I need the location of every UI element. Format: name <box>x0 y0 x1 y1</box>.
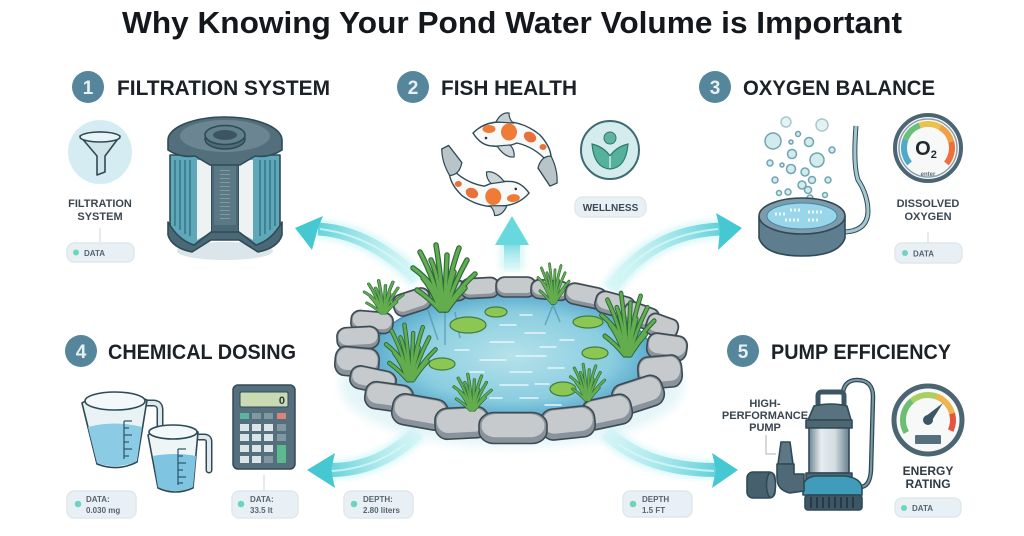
data pill: 0.030 mg <box>67 491 136 518</box>
heading: pump efficiency: PUMP EFFICIENCY <box>771 340 951 364</box>
data pill: DATA <box>912 504 933 513</box>
calculator <box>233 385 295 469</box>
data pill: 1.5 FT: DEPTH <box>642 495 669 504</box>
heading: fish health: 2 <box>408 78 418 99</box>
label: dissolved oxygen: DISSOLVED <box>897 198 959 210</box>
water <box>372 294 652 418</box>
heading: chemical dosing: 4 <box>76 342 87 363</box>
data pill <box>895 498 961 517</box>
icon: funnel <box>68 120 132 184</box>
gauge: dissolved oxygen: O <box>915 138 931 160</box>
submersible pump <box>747 380 873 510</box>
heading: oxygen balance <box>699 71 935 103</box>
pond plants <box>364 245 654 410</box>
data pill: 0.030 mg: 0.030 mg <box>86 506 120 515</box>
label: dissolved oxygen: OXYGEN <box>904 211 952 223</box>
label: high-performance pump: PERFORMANCE <box>722 410 808 422</box>
data pill: 33.5 lt <box>232 475 298 518</box>
data pill: 2.80 liters <box>344 491 413 518</box>
arrow: to oxygen <box>610 213 742 290</box>
heading: oxygen balance: 3 <box>710 78 720 99</box>
measuring jugs <box>82 392 209 492</box>
lily pads <box>429 307 608 396</box>
label: energy rating: RATING <box>905 477 951 491</box>
title: Why Knowing Your Pond Water Volume is Important <box>122 5 902 40</box>
arrow: to filtration <box>295 216 418 280</box>
air stone hose <box>842 126 868 232</box>
filter cartridge <box>168 117 282 260</box>
label: energy rating: ENERGY <box>903 464 953 478</box>
data pill: DATA <box>913 250 934 258</box>
heading: fish health <box>397 71 577 103</box>
panel: filtration system <box>67 71 330 262</box>
central pond <box>334 245 689 447</box>
data pill: 33.5 lt: 33.5 lt <box>250 506 273 515</box>
gauge: energy rating <box>894 386 962 454</box>
data pill: 0.030 mg: DATA: <box>86 495 110 504</box>
heading: filtration system: 1 <box>83 78 94 99</box>
heading: oxygen balance: OXYGEN BALANCE <box>743 76 935 100</box>
data pill: 1.5 FT <box>623 491 692 517</box>
arrows <box>295 213 742 488</box>
label: filtration system: SYSTEM <box>77 211 123 223</box>
heading: filtration system: FILTRATION SYSTEM <box>117 76 330 100</box>
data pill: 2.80 liters: 2.80 liters <box>363 506 400 515</box>
heading: chemical dosing <box>65 335 296 367</box>
gauge: dissolved oxygen: 2 <box>931 149 937 161</box>
calculator: 0 <box>279 395 285 407</box>
label: high-performance pump: PUMP <box>749 422 781 434</box>
data pill <box>67 228 134 262</box>
arrow: to pump <box>606 432 738 488</box>
label pill: wellness <box>575 197 646 217</box>
panel: oxygen balance <box>699 71 962 263</box>
koi fish pair <box>441 113 557 219</box>
bubbles <box>765 117 835 206</box>
data pill: DATA <box>84 249 105 258</box>
panel: pump efficiency <box>623 335 962 517</box>
heading: pump efficiency: 5 <box>738 342 749 363</box>
label: high-performance pump: HIGH- <box>749 398 781 410</box>
data pill: 1.5 FT: 1.5 FT <box>642 506 665 515</box>
label pill: wellness: WELLNESS <box>583 203 639 214</box>
arrow: to chemical dosing <box>307 432 418 488</box>
stones <box>334 277 689 444</box>
gauge: dissolved oxygen: enter <box>921 172 936 178</box>
heading: pump efficiency <box>727 335 951 367</box>
data pill <box>895 232 962 263</box>
aerator disc <box>759 198 845 256</box>
label: high-performance pump <box>722 398 808 454</box>
hose highlight <box>842 126 868 232</box>
arrow: up to fish <box>495 216 529 272</box>
icon: wellness <box>581 121 639 179</box>
data pill: 33.5 lt: DATA: <box>250 495 274 504</box>
heading: filtration system <box>72 71 330 103</box>
panel: chemical dosing <box>65 335 413 518</box>
gauge: dissolved oxygen <box>895 115 961 181</box>
heading: chemical dosing: CHEMICAL DOSING <box>108 340 296 364</box>
heading: fish health: FISH HEALTH <box>441 76 577 100</box>
data pill: 2.80 liters: DEPTH: <box>363 495 393 504</box>
panel: fish health <box>397 71 646 219</box>
label: filtration system: FILTRATION <box>68 198 132 210</box>
